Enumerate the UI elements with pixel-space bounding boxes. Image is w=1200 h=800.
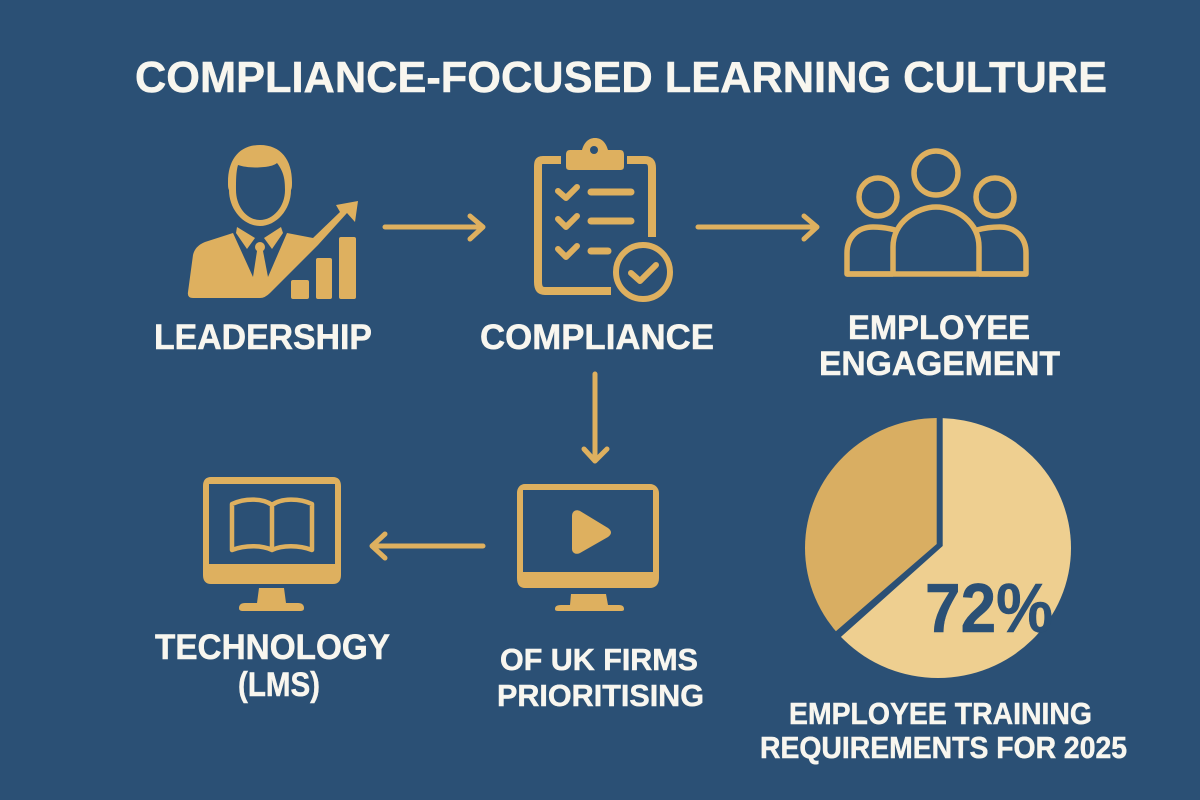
label: employee engagement: ENGAGEMENT: [819, 345, 1060, 383]
label: of uk firms prioritising: PRIORITISING: [497, 678, 704, 713]
label: technology (lms): (LMS): [238, 666, 320, 704]
label: employee training requirements for 2025: EMPLOYEE TRAINING: [789, 696, 1092, 731]
icon: leadership: [188, 145, 358, 299]
label: employee engagement: EMPLOYEE: [848, 309, 1030, 347]
label: leadership: LEADERSHIP: [154, 318, 372, 357]
label: employee engagement: [819, 309, 1060, 383]
value: 72%: 72%: [925, 569, 1053, 647]
label: compliance: COMPLIANCE: [480, 318, 714, 357]
icon: compliance clipboard: [538, 138, 670, 299]
label: of uk firms prioritising: OF UK FIRMS: [500, 642, 698, 677]
arrow: compliance down to video: [584, 374, 607, 461]
pie chart: 72%: [805, 418, 1071, 678]
label: of uk firms prioritising: [497, 642, 704, 713]
icon: employee group: [847, 151, 1026, 274]
label: employee training requirements for 2025: [760, 696, 1127, 765]
arrow: compliance to employee engagement: [698, 216, 817, 239]
label: technology (lms): [155, 628, 390, 704]
title: COMPLIANCE-FOCUSED LEARNING CULTURE: [135, 53, 1107, 102]
icon: technology monitor with book: [203, 477, 341, 611]
arrow: video to technology: [372, 534, 483, 558]
label: employee training requirements for 2025: REQUIREMENTS FOR 2025: [760, 730, 1127, 765]
icon: video monitor: [517, 484, 659, 611]
arrow: leadership to compliance: [385, 216, 483, 239]
label: technology (lms): TECHNOLOGY: [155, 628, 390, 667]
